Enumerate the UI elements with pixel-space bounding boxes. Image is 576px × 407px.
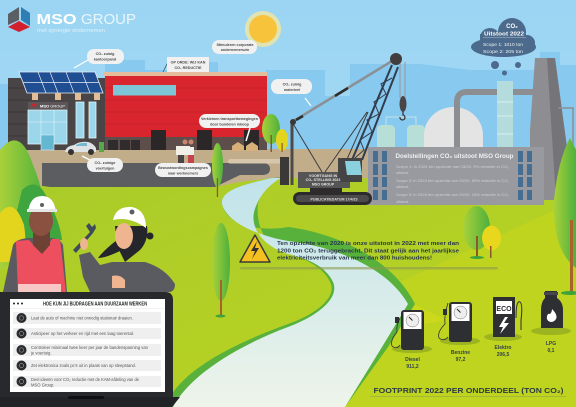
callout: voertuigen [82, 156, 123, 172]
footprint heading: FOOTPRINT 2022 PER ONDERDEEL (TON CO₂) [374, 386, 564, 395]
tip 4: Zet elektronica zoals pc's uit in plaats van op sleepstand. [31, 363, 136, 368]
tip 5 [13, 376, 161, 388]
windows right [518, 151, 532, 200]
cloud: CO2 emissions: Scope 1: 1010 ton [483, 42, 523, 47]
main statement: elektriciteitsverbruik van meer dan 800 huishoudens! [277, 256, 432, 262]
cylinder: LPG: 0,1 [548, 348, 555, 354]
callout: Op orde: CO₂ REDUCTIE [174, 66, 202, 70]
main statement [240, 241, 498, 270]
tree: poplar upper [212, 143, 223, 197]
pump: elektro: Elektro [495, 345, 511, 351]
targets text: Scope 2: in 2024 ten opzichte van 03/20, 50% reductie in CO₂ [396, 179, 510, 183]
crane tracks [293, 188, 372, 205]
smoke puffs [491, 61, 521, 76]
boxes [232, 142, 258, 151]
pump: benzine [439, 302, 480, 363]
targets text: Scope 1: in 2024 ten opzichte van 03/20, 9% reductie in CO₂ [396, 165, 510, 169]
warehouse doors [151, 130, 259, 150]
icon: wrench [73, 223, 96, 253]
warehouse window [113, 85, 176, 96]
callout: Op orde: OP ORDE: WIJ KAN [171, 60, 206, 64]
office sign: MSO GROUP [40, 104, 65, 108]
callout: CO2 zuinig kantoorpand [74, 49, 124, 68]
trees: left hill [0, 140, 62, 270]
callout: transport: Verkleinen transportbewegingen [201, 117, 259, 121]
main statement: 1200 ton CO₂ teruggebracht. Dit staat gelijk aan het jaarlijkse [277, 248, 459, 254]
windows left [373, 151, 387, 200]
trees: by warehouse [262, 114, 288, 152]
tip 2: Anticipeer op het verkeer en rijd met een laag toerental. [31, 331, 134, 336]
tip 2 [13, 328, 161, 339]
callout: bewustwording: Bewustwordingscampagnes [158, 166, 208, 170]
laptop heading [13, 302, 147, 308]
main statement: Ten opzichte van 2020 is onze uitstoot in 2022 met meer dan [277, 241, 460, 247]
icon: warning triangle [240, 235, 270, 262]
tip 1 [13, 312, 161, 324]
tip 5: Deel ideeën voor CO₂ reductie met de KAM-afdeling van de [31, 377, 140, 382]
laptop [0, 292, 180, 407]
logo: met synergie ondernemen [37, 28, 105, 34]
trees: right of river [463, 206, 501, 259]
pipes [457, 92, 534, 147]
callout: voertuigen: voertuigen [96, 166, 115, 170]
callout: CO2 zuinig kantoorpand: kantoorpand [94, 58, 117, 62]
cylinder: LPG [531, 291, 571, 354]
river edge [165, 177, 415, 407]
pump: elektro: 206,5 [497, 352, 509, 358]
targets text: Scope 3: in 2026 ten opzichte van 03/20, 15% reductie in CO₂ [396, 193, 510, 197]
callout: voertuigen: CO₂ zuinige [95, 161, 115, 165]
crane left counterweight [280, 157, 289, 185]
logo: GROUP [81, 11, 136, 28]
laptop heading: HOE KUN JIJ BIJDRAGEN AAN DUURZAAM WERKEN [43, 302, 147, 308]
crane body: CO₂ STELLING 2023 [306, 178, 340, 182]
crane body [298, 158, 362, 188]
worker: woman with wrench [73, 207, 175, 292]
cloud: CO2 emissions: Uitstoot 2022 [484, 32, 524, 38]
small scaffold [558, 108, 573, 150]
callout: stimuleren: ondernemerszin [221, 48, 250, 52]
car [65, 142, 104, 155]
tip 3 [13, 344, 161, 356]
pump: diesel: Diesel [405, 357, 420, 363]
pump: elektro: ECO [496, 306, 512, 313]
building: red warehouse [103, 72, 267, 150]
tree: poplar lower [212, 223, 230, 318]
pump: diesel: 911,2 [406, 364, 419, 370]
building: office [8, 72, 106, 150]
pump: benzine: Benzine [451, 350, 470, 356]
laptop screen [10, 299, 165, 392]
engineers with plan [176, 140, 194, 163]
callout: bewustwording: naar werknemers [168, 172, 198, 176]
chimney [530, 58, 574, 200]
river [173, 178, 408, 407]
pump: benzine: 97,2 [456, 357, 466, 363]
pump: diesel [392, 310, 432, 370]
logo [8, 7, 136, 34]
crane body: VOORTGANG IN [309, 174, 337, 178]
tip 5: MSO Group. [31, 382, 55, 388]
panel: targets [368, 147, 544, 205]
tip 1: Laat de auto of machine niet onnodig stationair draaien. [31, 316, 133, 320]
cylinder: LPG: LPG [546, 341, 556, 347]
crane tracks: PUBLICATIEDATUM 17/4/23 [310, 198, 358, 202]
logo wordmark: MSO [36, 11, 77, 28]
yellow wedge [402, 303, 445, 328]
crane [280, 53, 406, 205]
callout: transport: door bundelen inkoop [210, 122, 250, 126]
cloud: CO2 emissions [471, 18, 536, 57]
office windows [28, 102, 96, 150]
targets text: uitstoot. [396, 200, 409, 204]
tip 3: je voertuig. [30, 350, 51, 356]
silhouette of factory [377, 58, 574, 200]
crane hoist [292, 61, 392, 122]
crane body: MSO GROUP [312, 182, 335, 186]
tower [497, 81, 513, 147]
ground: tan yard [0, 149, 576, 189]
callout: bewustwording [155, 163, 211, 177]
targets text: uitstoot. [396, 185, 409, 189]
worker: man in red vest [3, 196, 67, 292]
cloud: CO2 emissions: CO₂ [506, 24, 518, 30]
callout: CO2 zuinig kantoorpand: CO₂ zuinig [96, 52, 114, 56]
tip 4 [13, 360, 161, 371]
targets heading: Doelstellingen CO₂ uitstoot MSO Group [396, 154, 514, 160]
callout: materieel: CO₂ zuinig [283, 82, 301, 86]
sun [245, 11, 281, 47]
road [42, 163, 270, 187]
right hill [340, 200, 576, 407]
sky background [0, 0, 576, 180]
callout: stimuleren: Stimuleren corporate [216, 43, 254, 47]
targets text [396, 165, 510, 204]
ground: lime field [0, 178, 576, 407]
callout: materieel [271, 79, 312, 106]
crane boom [352, 65, 398, 160]
callout: transport [199, 114, 260, 141]
callout: Op orde [163, 57, 209, 72]
crane hook [400, 96, 406, 120]
solar panels [19, 72, 103, 93]
callout: stimuleren [212, 40, 257, 54]
roof supports [32, 93, 100, 100]
cloud: CO2 emissions: Scope 2: 205 ton [483, 49, 523, 54]
tip 3: Controleer minimaal twee keer per jaar de bandenspanning van [31, 345, 149, 350]
tanks [377, 107, 483, 147]
icon: MSO cube [8, 7, 30, 32]
city silhouette [0, 52, 576, 160]
pump: elektro [484, 297, 522, 358]
tree: far right [554, 138, 576, 295]
targets text: uitstoot. [396, 171, 409, 175]
callout: materieel: materieel [284, 88, 300, 92]
